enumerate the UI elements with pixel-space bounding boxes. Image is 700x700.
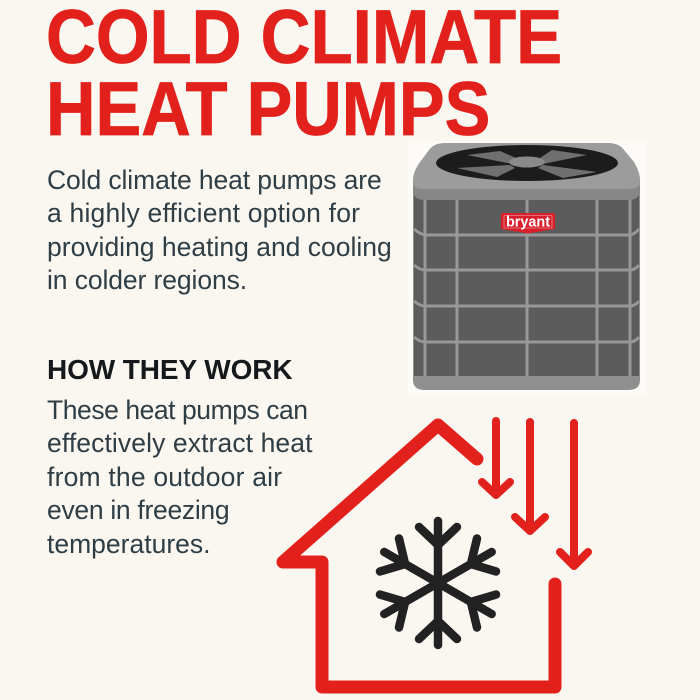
intro text: a highly efficient option for	[47, 198, 360, 228]
icon: snowflake	[375, 521, 501, 645]
logo: bryant	[506, 214, 550, 230]
section heading: HOW THEY WORK	[47, 354, 293, 385]
how they work text: even in freezing	[47, 495, 229, 525]
intro text: providing heating and cooling	[47, 232, 392, 262]
icon: heat pump unit	[408, 141, 646, 395]
intro text: Cold climate heat pumps are	[47, 165, 382, 195]
intro text: in colder regions.	[47, 265, 247, 295]
how they work text: effectively extract heat	[47, 428, 313, 458]
how they work text	[47, 395, 313, 559]
how they work text: These heat pumps can	[47, 395, 308, 425]
title: HEAT PUMPS	[46, 67, 490, 152]
how they work text: from the outdoor air	[47, 462, 282, 492]
arrows	[482, 421, 588, 566]
logo	[501, 213, 555, 234]
title	[46, 0, 562, 152]
intro text	[47, 165, 392, 295]
how they work text: temperatures.	[47, 529, 210, 559]
icon: house outline	[283, 425, 555, 687]
